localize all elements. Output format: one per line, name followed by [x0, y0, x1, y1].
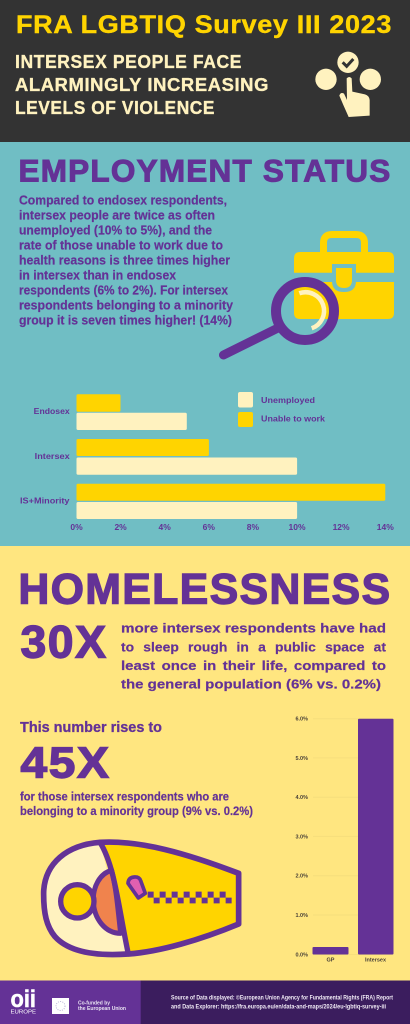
x axis labels: 10% [288, 522, 306, 532]
panel: header [0, 0, 410, 142]
text block: employment summary [19, 193, 233, 327]
subtitle: LEVELS OF VIOLENCE [15, 98, 215, 118]
y axis labels: 2.0% [295, 874, 308, 880]
heading: homelessness: HOMELESSNESS [18, 566, 392, 614]
legend: Unable to work [261, 415, 326, 424]
text block: 30X explanation: to sleep rough in a public space at [121, 640, 387, 654]
y axis labels: 0.0% [295, 952, 308, 958]
y axis labels: 1.0% [295, 913, 308, 919]
text block: 30X explanation: the general population (6% vs. 0.2%) [121, 676, 381, 692]
logo: OII Europe: oii [10, 986, 36, 1013]
stat: 30X: 30X [20, 616, 108, 668]
bar chart: employment [20, 392, 394, 532]
logo: OII Europe: EUROPE [10, 1010, 36, 1016]
icon: sleeping bag [44, 842, 239, 955]
text block: 45X explanation: for those intersex respondents who are [20, 790, 229, 804]
text block: employment summary: unemployed (10% to 5%), and the [19, 223, 212, 237]
text block: employment summary: Compared to endosex respondents, [19, 193, 227, 207]
text block: 30X explanation: more intersex respondents have had [121, 621, 386, 636]
subtitle: INTERSEX PEOPLE FACE [15, 52, 242, 72]
panel: employment status [0, 142, 410, 546]
text: co-funded by the European Union: the European Union [78, 1006, 126, 1012]
x axis labels: 14% [377, 522, 394, 532]
text: this number rises to: This number rises to [20, 719, 162, 736]
category labels: Intersex [35, 452, 70, 461]
y axis labels: 6.0% [295, 717, 308, 723]
heading: employment status: EMPLOYMENT STATUS [18, 152, 392, 188]
gridlines [313, 719, 393, 954]
text block: employment summary: intersex people are twice as often [19, 208, 215, 222]
text: data source [171, 994, 394, 1010]
panel: footer [0, 980, 410, 1024]
x axis labels [70, 522, 394, 532]
category labels: Endosex [34, 407, 70, 416]
title: FRA LGBTIQ Survey III 2023 [16, 11, 392, 39]
y axis labels: 3.0% [295, 834, 308, 840]
x axis labels: 4% [159, 522, 171, 532]
subtitle [15, 52, 269, 118]
panel: homelessness [0, 546, 410, 981]
bars [312, 719, 394, 954]
x axis labels: 12% [333, 522, 350, 532]
text: co-funded by the European Union [78, 1000, 126, 1012]
text block: 30X explanation: least once in their life, compared to [121, 658, 386, 673]
bars [76, 394, 385, 519]
subtitle: ALARMINGLY INCREASING [15, 75, 269, 95]
x axis labels: 6% [203, 522, 215, 532]
icon: briefcase with magnifier [224, 234, 394, 355]
text block: 30X explanation [121, 621, 387, 692]
bar chart: homelessness GP vs intersex [295, 717, 394, 964]
category labels: IS+Minority [20, 497, 70, 506]
text block: employment summary: rate of those unable to work due to [19, 238, 223, 252]
x axis labels [327, 958, 387, 964]
category labels [20, 407, 70, 506]
text block: employment summary: respondents (6% to 2%). For intersex [19, 283, 228, 297]
logo: EU flag [52, 998, 69, 1014]
stat: 45X: 45X [20, 738, 110, 788]
text block: 45X explanation: belonging to a minority group (9% vs. 0.2%) [20, 804, 253, 818]
y axis labels [295, 717, 308, 958]
x axis labels: Intersex [365, 958, 387, 964]
x axis labels: 0% [70, 522, 83, 532]
text: co-funded by the European Union: Co-funded by [78, 1000, 110, 1006]
icon: hand choosing option [315, 52, 381, 117]
y axis labels: 5.0% [295, 756, 308, 762]
legend [238, 392, 326, 427]
text block: employment summary: respondents belonging to a minority [19, 298, 233, 312]
text block: employment summary: in intersex than in endosex [19, 268, 176, 282]
legend: Unemployed [261, 396, 315, 405]
text block: employment summary: group it is seven times higher! (14%) [19, 313, 232, 327]
x axis labels: 2% [114, 522, 127, 532]
y axis labels: 4.0% [295, 795, 308, 801]
text block: employment summary: health reasons is three times higher [19, 253, 230, 267]
text block: 45X explanation [20, 790, 253, 818]
x axis labels: GP [327, 958, 335, 964]
x axis labels: 8% [247, 522, 259, 532]
